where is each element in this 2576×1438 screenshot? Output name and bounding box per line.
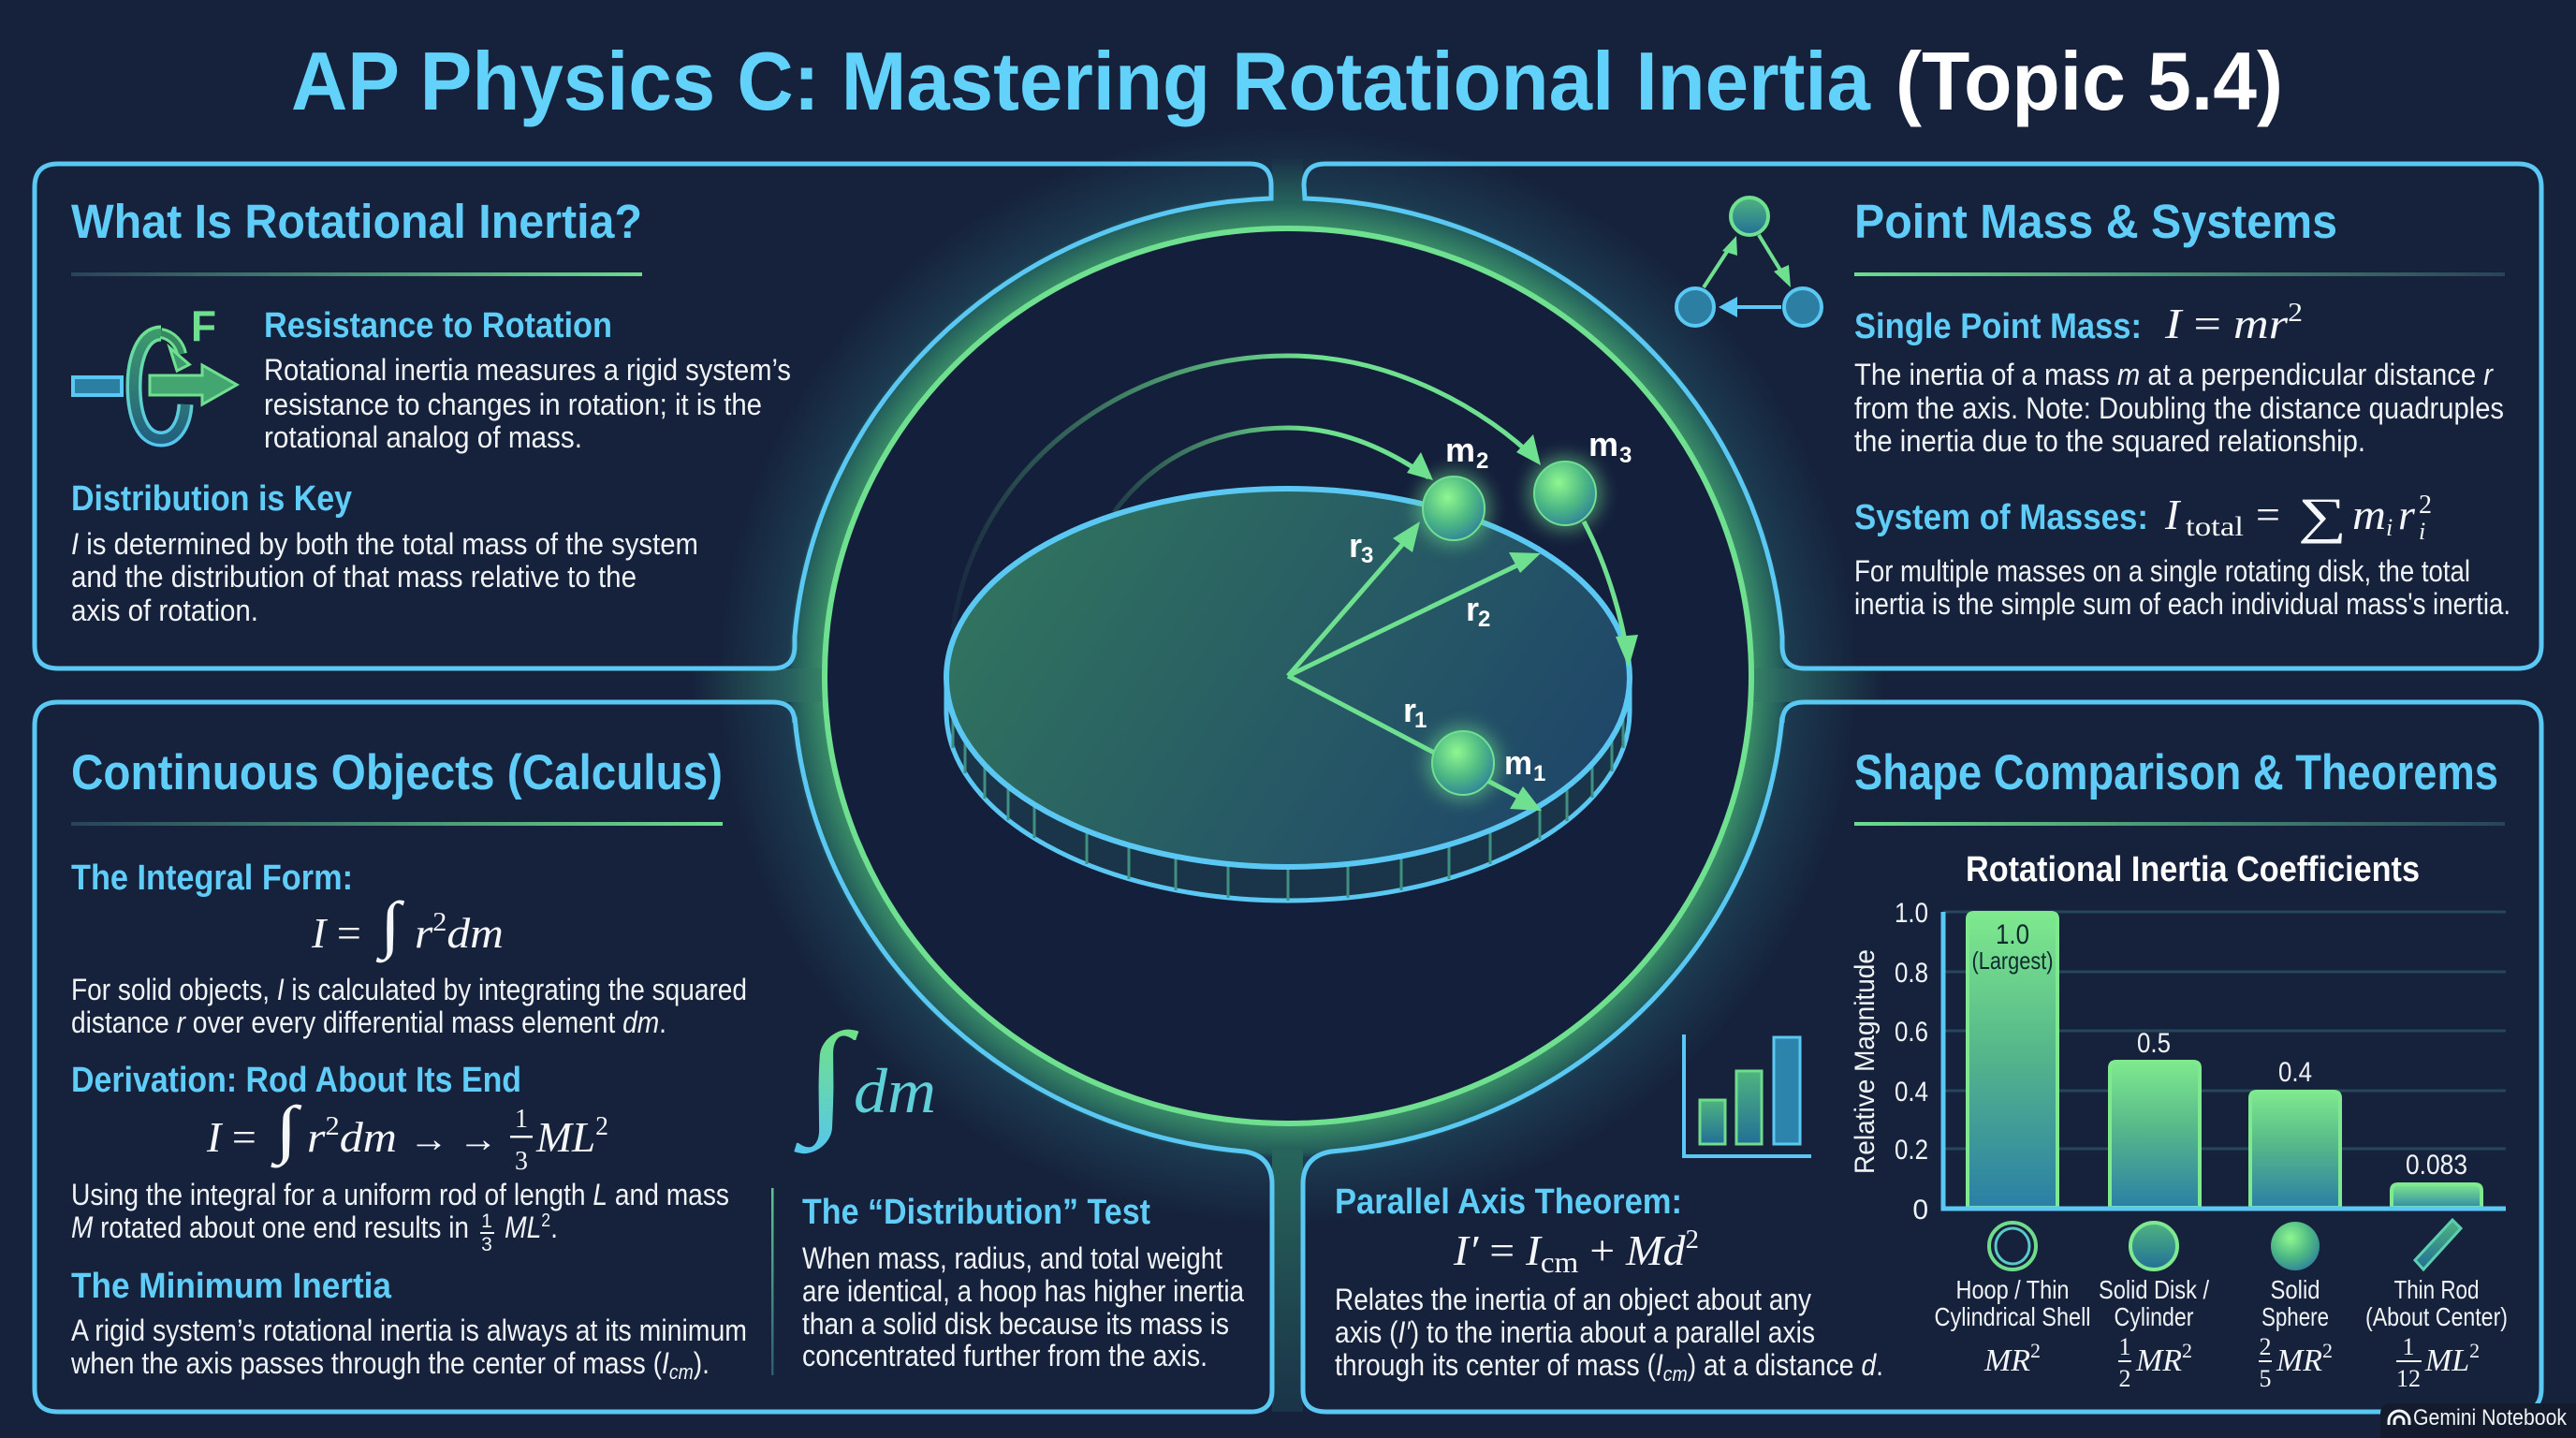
bar value labels: (Largest) xyxy=(1971,946,2054,975)
category: thin rod: (About Center) xyxy=(2365,1302,2508,1331)
mass m1 xyxy=(1426,726,1545,800)
category: hoop: Cylindrical Shell xyxy=(1934,1302,2091,1331)
text block: resistance to rotation: rotational analog of mass. xyxy=(264,420,582,454)
category: solid sphere: 2 xyxy=(2260,1333,2271,1360)
text block: parallel axis theorem: ) at a distance xyxy=(1688,1348,1861,1382)
text block: derivation rod about its end: 3 xyxy=(481,1234,492,1255)
text block: parallel axis theorem: axis (I′) to the inertia about a parallel axis xyxy=(1335,1315,1815,1349)
bar value labels: 0.083 xyxy=(2406,1150,2467,1181)
category: solid sphere: 2 xyxy=(2322,1339,2333,1362)
text block: derivation rod about its end: ML xyxy=(535,1113,595,1161)
text block: derivation rod about its end xyxy=(71,1061,729,1255)
y axis ticks: 0 xyxy=(1912,1195,1928,1225)
text block: system of masses: For multiple masses on a single rotating disk, the total xyxy=(1854,554,2470,588)
text block: derivation rod about its end: Using the integral for a uniform rod of length L and mass xyxy=(71,1178,729,1211)
text block: derivation rod about its end: I = xyxy=(206,1113,256,1161)
category: hoop xyxy=(1934,1275,2091,1378)
text block: single point mass: 2 xyxy=(2288,299,2303,328)
text block: parallel axis theorem: I′ = I xyxy=(1454,1226,1540,1274)
heading: what is rotational inertia: What Is Rotational Inertia? xyxy=(71,195,642,248)
category: solid disk: Cylinder xyxy=(2114,1302,2194,1331)
text block: the minimum inertia: ). xyxy=(694,1346,710,1380)
text block: the distribution test: are identical, a hoop has higher inertia xyxy=(802,1274,1244,1308)
icon: three connected masses xyxy=(1676,198,1822,326)
central disk diagram xyxy=(946,356,1638,901)
heading: continuous objects: Continuous Objects (Calculus) xyxy=(71,745,723,800)
text block: distribution is key: Distribution is Key xyxy=(71,479,352,519)
y axis label: Relative Magnitude xyxy=(1850,949,1881,1174)
text block: system of masses: System of Masses: xyxy=(1854,498,2148,537)
category: hoop: MR xyxy=(1984,1343,2030,1378)
category: hoop: Hoop / Thin xyxy=(1956,1275,2069,1304)
text block: system of masses: 2 xyxy=(2419,491,2432,520)
text block: system of masses: r xyxy=(2398,491,2416,538)
icon: rotation axis with force xyxy=(73,301,237,439)
text block: the distribution test: concentrated further from the axis. xyxy=(802,1339,1208,1372)
text block: the distribution test: than a solid disk because its mass is xyxy=(802,1307,1229,1341)
text block: distribution is key: axis of rotation. xyxy=(71,594,258,627)
icon: solid sphere xyxy=(2271,1222,2320,1270)
text block: the minimum inertia: A rigid system’s rotational inertia is always at its minimum xyxy=(71,1313,747,1347)
text block: parallel axis theorem: d. xyxy=(1861,1348,1884,1382)
text block: resistance to rotation xyxy=(264,306,791,454)
text block: system of masses: I xyxy=(2164,491,2182,538)
text block: parallel axis theorem xyxy=(1335,1182,1883,1386)
radius vectors xyxy=(1288,521,1542,811)
icon: integral dm: dm xyxy=(854,1055,936,1126)
category: hoop: 2 xyxy=(2030,1339,2041,1362)
text block: derivation rod about its end: dm xyxy=(340,1113,397,1161)
chart title: Rotational Inertia Coefficients xyxy=(1966,850,2420,889)
text block: the integral form xyxy=(71,858,747,1039)
text block: parallel axis theorem: Relates the inertia of an object about any xyxy=(1335,1283,1811,1316)
mass m1: 1 xyxy=(1533,761,1545,786)
text block: derivation rod about its end: 3 xyxy=(515,1147,528,1176)
text block: single point mass: the inertia due to the squared relationship. xyxy=(1854,424,2365,458)
category: solid disk xyxy=(2099,1275,2209,1392)
text block: distribution is key xyxy=(71,479,698,627)
y axis ticks: 1.0 xyxy=(1895,898,1928,929)
mass m1: m xyxy=(1504,743,1532,782)
text block: parallel axis theorem: through its center of mass (I xyxy=(1335,1348,1698,1382)
text block: single point mass: from the axis. Note: Doubling the distance quadruples xyxy=(1854,391,2504,425)
text block: parallel axis theorem: + xyxy=(1578,1226,1626,1274)
text block: the minimum inertia xyxy=(70,1267,747,1384)
panel: continuous objects xyxy=(35,702,1272,1412)
radius labels: 3 xyxy=(1361,543,1373,568)
central ring connector xyxy=(689,98,1887,1412)
title: AP Physics C: Mastering Rotational Inertia xyxy=(291,35,1871,127)
text block: the minimum inertia: when the axis passes through the center of mass (I xyxy=(71,1346,740,1380)
text block: system of masses: total xyxy=(2186,511,2244,542)
text block: system of masses: = xyxy=(2256,491,2280,538)
category: thin rod: ML xyxy=(2425,1343,2469,1378)
text block: parallel axis theorem: cm xyxy=(1541,1245,1578,1279)
radius labels: r xyxy=(1403,691,1416,729)
text block: derivation rod about its end: r xyxy=(307,1113,327,1161)
text block: parallel axis theorem: Md xyxy=(1625,1226,1687,1274)
bars xyxy=(1968,913,2481,1208)
mass m2 xyxy=(1416,431,1491,546)
text block: the distribution test: When mass, radius, and total weight xyxy=(802,1241,1222,1275)
y axis ticks xyxy=(1895,898,1928,1225)
icon: integral dm xyxy=(793,1008,936,1154)
text block: single point mass: I = mr xyxy=(2165,300,2281,347)
icon: rotation axis with force: F xyxy=(191,301,216,350)
text block: the minimum inertia: The Minimum Inertia xyxy=(71,1267,392,1306)
icon: small bar chart xyxy=(1684,1034,1811,1156)
category: solid sphere: Solid xyxy=(2271,1275,2320,1304)
radius labels: r xyxy=(1349,526,1362,565)
text block: system of masses: ∑ xyxy=(2298,488,2347,544)
radius labels: 1 xyxy=(1414,708,1427,733)
text block: the integral form: r xyxy=(415,909,433,957)
bar value labels: 0.5 xyxy=(2137,1028,2171,1059)
y axis ticks: 0.8 xyxy=(1895,958,1928,989)
text block: system of masses xyxy=(1854,488,2510,621)
heading: point mass and systems: Point Mass & Systems xyxy=(1854,195,2337,248)
text block: the distribution test xyxy=(802,1193,1244,1372)
icon: solid disk xyxy=(2130,1223,2177,1269)
text block: derivation rod about its end: 1 xyxy=(481,1211,492,1232)
text block: system of masses: m xyxy=(2352,491,2386,538)
category: thin rod xyxy=(2365,1275,2508,1392)
text block: derivation rod about its end: Derivation: Rod About Its End xyxy=(71,1061,521,1100)
category: thin rod: 1 xyxy=(2402,1333,2415,1360)
bar value labels xyxy=(1971,919,2467,1181)
bar value labels: 0.4 xyxy=(2278,1057,2312,1088)
category: solid disk: MR xyxy=(2136,1343,2182,1378)
text block: derivation rod about its end: ∫ xyxy=(271,1093,302,1168)
text block: the integral form: dm xyxy=(446,909,504,957)
text block: the integral form: ∫ xyxy=(375,888,405,963)
text block: the integral form: distance r over every differential mass element dm. xyxy=(71,1005,666,1039)
category: solid disk: 2 xyxy=(2182,1339,2192,1362)
badge: gemini notebook xyxy=(2380,1403,2576,1438)
text block: resistance to rotation: resistance to changes in rotation; it is the xyxy=(264,388,762,421)
category: solid sphere xyxy=(2259,1275,2333,1392)
text block: derivation rod about its end: 2 xyxy=(541,1211,550,1231)
text block: derivation rod about its end: 2 xyxy=(595,1112,608,1141)
disk body xyxy=(946,489,1630,901)
text block: derivation rod about its end: → → xyxy=(409,1118,498,1160)
title: (Topic 5.4) xyxy=(1895,35,2283,127)
category: solid sphere: MR xyxy=(2276,1343,2322,1378)
text block: single point mass: Single Point Mass: xyxy=(1854,307,2142,346)
text block: derivation rod about its end: M rotated about one end results in xyxy=(71,1211,469,1244)
radius labels: r xyxy=(1466,590,1479,628)
y axis ticks: 0.2 xyxy=(1895,1135,1928,1166)
category: solid sphere: 5 xyxy=(2260,1365,2271,1392)
radius labels xyxy=(1349,526,1490,733)
text block: derivation rod about its end: 1 xyxy=(515,1105,528,1134)
text block: derivation rod about its end: . xyxy=(550,1211,558,1244)
orbit arrows xyxy=(953,356,1638,668)
bar value labels: 1.0 xyxy=(1996,919,2029,950)
text block: single point mass: The inertia of a mass m at a perpendicular distance r xyxy=(1854,358,2494,391)
category: solid disk: 1 xyxy=(2119,1333,2130,1360)
text block: distribution is key: I is determined by both the total mass of the system xyxy=(71,527,698,561)
text block: the integral form: I = xyxy=(311,909,361,957)
category: thin rod: 2 xyxy=(2469,1339,2480,1362)
text block: system of masses: i xyxy=(2386,514,2393,541)
bar chart: rotational inertia coefficients xyxy=(1850,850,2508,1392)
text block: resistance to rotation: Rotational inertia measures a rigid system’s xyxy=(264,353,791,387)
text block: the integral form: 2 xyxy=(432,908,446,937)
icon: hoop xyxy=(1989,1223,2036,1269)
y axis ticks: 0.6 xyxy=(1895,1017,1928,1048)
radius labels: 2 xyxy=(1478,607,1490,632)
category: solid disk: Solid Disk / xyxy=(2099,1275,2209,1304)
mass m2: m xyxy=(1445,431,1475,469)
text block: resistance to rotation: Resistance to Rotation xyxy=(264,306,612,345)
icon: integral dm: ∫ xyxy=(793,1008,858,1154)
text block: derivation rod about its end: ML xyxy=(505,1211,541,1244)
panel: point mass and systems xyxy=(1304,164,2541,668)
text block: parallel axis theorem: 2 xyxy=(1686,1225,1699,1255)
icon: thin rod xyxy=(2415,1220,2461,1269)
text block: the integral form: For solid objects, I is calculated by integrating the squared xyxy=(71,973,747,1006)
mass m3: m xyxy=(1588,425,1618,463)
panel: shape comparison and theorems xyxy=(1303,702,2541,1412)
panel: what is rotational inertia xyxy=(35,164,1271,668)
category: thin rod: Thin Rod xyxy=(2394,1275,2479,1304)
category: solid sphere: Sphere xyxy=(2261,1302,2329,1331)
y axis ticks: 0.4 xyxy=(1895,1077,1928,1108)
category: thin rod: 12 xyxy=(2396,1365,2421,1392)
text block: single point mass xyxy=(1854,299,2504,458)
text block: parallel axis theorem: cm xyxy=(1663,1362,1688,1386)
text block: the minimum inertia: cm xyxy=(669,1360,694,1384)
text block: parallel axis theorem: Parallel Axis Theorem: xyxy=(1335,1182,1682,1222)
mass m3 xyxy=(1528,425,1632,531)
text block: distribution is key: and the distribution of that mass relative to the xyxy=(71,560,637,594)
text block: derivation rod about its end: 2 xyxy=(326,1112,340,1141)
text block: the integral form: The Integral Form: xyxy=(71,858,353,898)
mass m2: 2 xyxy=(1476,448,1488,474)
text block: system of masses: i xyxy=(2419,518,2425,545)
mass m3: 3 xyxy=(1619,443,1632,468)
text block: the distribution test: The “Distribution” Test xyxy=(802,1193,1150,1232)
category: solid disk: 2 xyxy=(2119,1365,2130,1392)
